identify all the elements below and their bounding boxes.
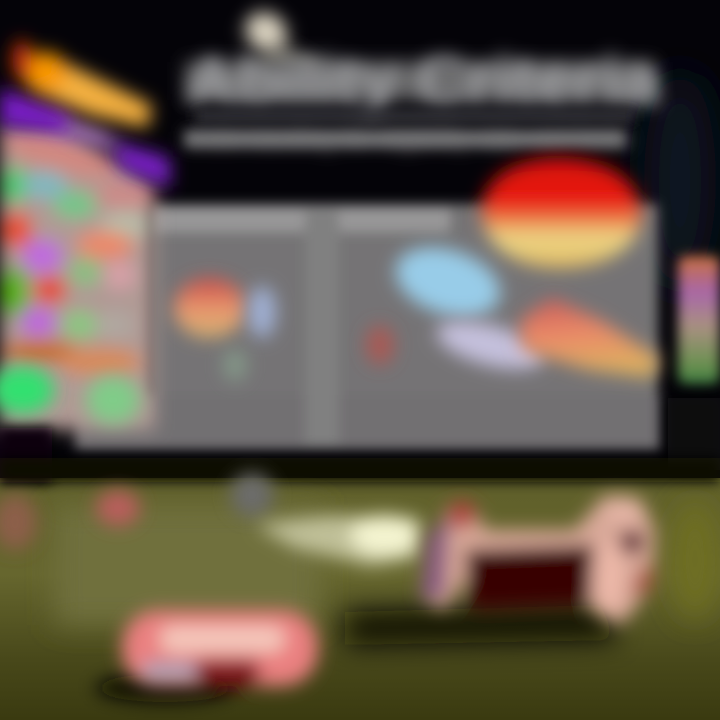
- icon: red and white striped capsule: [122, 610, 318, 686]
- tile row 1: [0, 124, 155, 209]
- icon: red and yellow diagonal ribbon: [520, 298, 660, 378]
- icon: faint red mark: [366, 325, 394, 365]
- shadow band under board: [0, 458, 720, 482]
- icon: lavender blob: [432, 311, 548, 379]
- faint reflected panel on ground: [55, 505, 320, 625]
- icon: purple ribbon right: [110, 140, 170, 188]
- icon: red and yellow dome: [482, 158, 641, 268]
- ground: grass field: [0, 478, 720, 720]
- panel: colourful tile column: [0, 124, 155, 430]
- icon: small red and white object: [96, 490, 140, 526]
- panel: gray board: [75, 204, 660, 450]
- tile row 5: [0, 341, 142, 376]
- title: Ability Criteria: [187, 43, 660, 117]
- icon: right side colour bar: [678, 256, 720, 384]
- icon: left red and white object: [0, 494, 37, 550]
- icon: green tile: [0, 366, 54, 414]
- icon: red and white striped object right: [420, 495, 655, 625]
- dark lower right post: [668, 398, 720, 470]
- icon: blue blob: [387, 235, 509, 329]
- subtitle backing: [185, 131, 625, 147]
- background glow: blue haze right: [644, 70, 716, 290]
- tile row 2: [0, 167, 149, 239]
- icon: orange ribbon: [12, 40, 152, 128]
- subtitle: Understanding the eligibility rules and limits: [185, 126, 630, 151]
- icon: shadow of right object: [345, 605, 620, 645]
- ground: bright olive right edge: [670, 500, 720, 620]
- icon: shadow of front object: [95, 674, 235, 702]
- title underbar shadow: [195, 110, 635, 122]
- tile row 4: [0, 266, 135, 339]
- icon: purple ribbon left: [0, 88, 75, 135]
- icon: faint green stem: [223, 349, 247, 381]
- tile row 3: [0, 212, 136, 289]
- title backing haze: [185, 62, 655, 100]
- icon: small red and yellow blob: [174, 278, 246, 338]
- icon: white spotlight: [237, 4, 295, 60]
- icon: lilac ribbon blend: [59, 117, 121, 153]
- icon: spotlight beam: [250, 40, 340, 78]
- icon: gray post: [230, 473, 274, 517]
- icon: white paper on ground: [255, 515, 420, 566]
- icon: small blue accent: [248, 286, 276, 338]
- dark gap below tiles: [0, 428, 52, 483]
- icon: pale green tile: [86, 376, 140, 424]
